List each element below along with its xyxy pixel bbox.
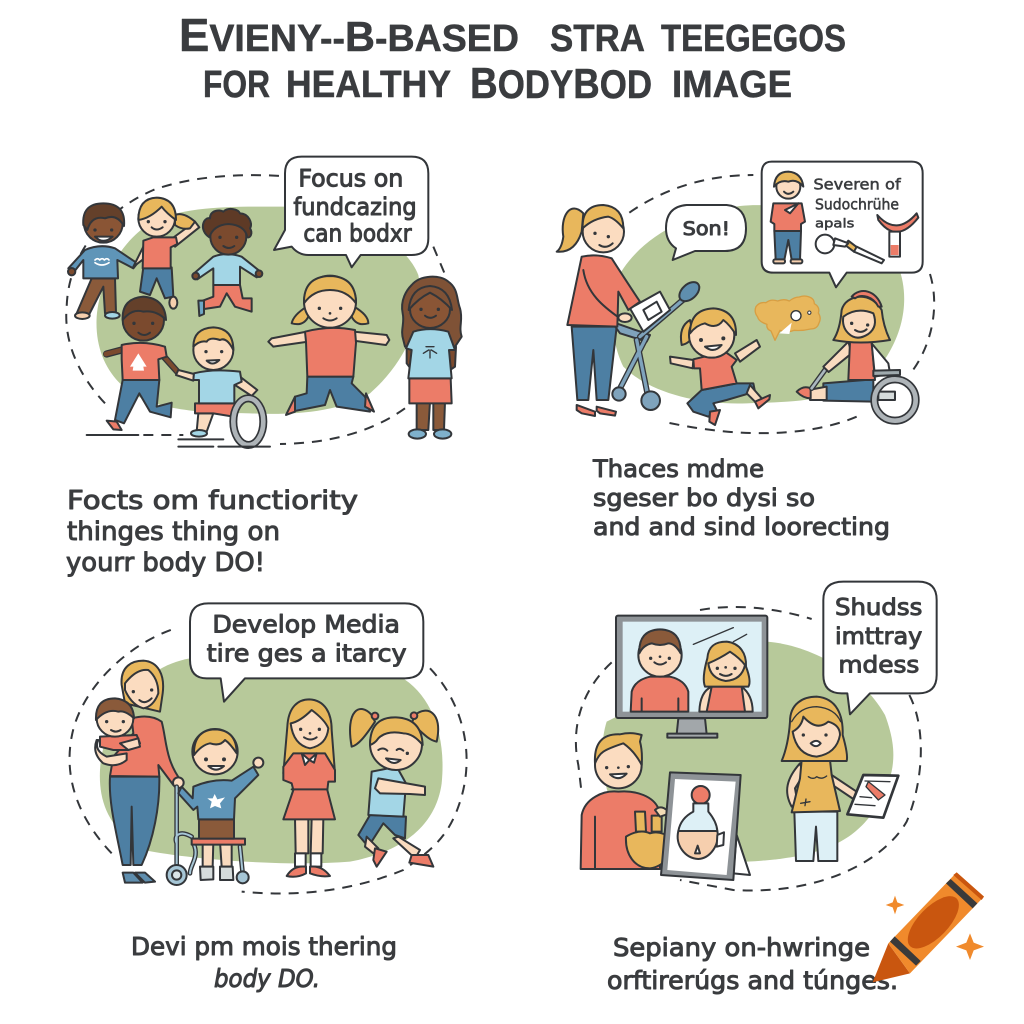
speech bubble: shudss: mdess (838, 652, 919, 678)
title: BODYBOD (470, 59, 652, 108)
caption: focus on functionality (66, 486, 358, 578)
icon: orange splat with thought (755, 296, 820, 340)
caption: develop media literacy (131, 932, 397, 993)
figure: smiling man with basket (581, 733, 672, 869)
title: HEALTHY (286, 64, 451, 106)
figure: girl with long dark hair (402, 277, 462, 439)
speech bubble: develop media (190, 603, 423, 702)
figure: curly-haired boy jumping (192, 209, 262, 316)
speech bubble: shudss: Shudss (835, 595, 922, 621)
figure: boy in salmon t-shirt running (106, 297, 177, 430)
speech bubble: seven goals: Severen of (813, 175, 901, 193)
speech bubble: son (666, 205, 746, 260)
speech bubble: focus on: can bodxr (303, 220, 412, 248)
icon: computer monitor with two people (616, 616, 767, 738)
speech bubble: focus on: fundcazing (293, 193, 417, 221)
figure: girl with pigtails skipping (350, 709, 438, 867)
speech bubble: son: Son! (683, 218, 730, 240)
icon: orange crayon with sparkles (873, 872, 984, 982)
panel: limit appearance talk (576, 582, 937, 890)
figure: laughing child sitting (670, 308, 770, 425)
speech bubble: focus on: Focus on (298, 165, 403, 193)
figure: blonde girl waving (133, 198, 199, 309)
speech bubble: develop media: Develop Media (212, 609, 400, 638)
caption: develop media literacy: body DO. (214, 964, 320, 993)
panel: develop media literacy (70, 603, 467, 893)
figure: girl in salmon dress (283, 699, 335, 877)
speech bubble: focus on (274, 157, 428, 267)
figure: girl in wheelchair (797, 291, 916, 421)
figure: mother holding baby (95, 661, 184, 883)
caption: develop media literacy: Devi pm mois thering (131, 932, 397, 961)
panel: focus on functionality (66, 157, 462, 447)
icon: little boy (771, 172, 805, 263)
icon: tools (816, 213, 918, 263)
figure: blonde boy with wheel (176, 327, 270, 447)
speech bubble: develop media: tire ges a itarcy (207, 639, 407, 668)
panel: family and body talk (557, 162, 934, 433)
figure: woman on screen (699, 642, 753, 712)
title (179, 9, 846, 108)
speech bubble: seven goals: Sudochrühe (815, 195, 899, 213)
caption: focus on functionality: yourr body DO! (66, 548, 265, 578)
figure: girl with clipboard (782, 697, 898, 861)
title: EVIENY--B-BASED (179, 9, 519, 61)
figure: girl with arms outstretched (268, 276, 389, 415)
speech bubble: seven goals: apals (815, 215, 854, 230)
speech bubble: seven goals (762, 162, 923, 287)
title: STRA (550, 18, 645, 60)
figure: man on screen (631, 629, 688, 712)
title: FOR (203, 64, 270, 106)
caption: focus on functionality: thinges thing on (67, 517, 280, 547)
speech bubble: shudss (823, 582, 937, 714)
figure: boy with walker waving (167, 729, 263, 885)
caption: self-compassion (592, 455, 890, 541)
figure: boy in blue sweater (68, 203, 137, 319)
title: IMAGE (672, 64, 792, 106)
caption: focus on functionality: Focts om functiority (67, 486, 358, 516)
speech bubble: shudss: imttray (835, 624, 922, 650)
caption: limit appearance talk (607, 933, 898, 995)
caption: self-compassion: and and sind loorecting (593, 513, 890, 541)
caption: self-compassion: sgeser bo dysi so (593, 484, 815, 512)
title: TEEGEGOS (661, 18, 846, 60)
icon: framed mirror with bottle (661, 772, 750, 880)
caption: limit appearance talk: orftirerúgs and túnges. (607, 966, 898, 995)
caption: self-compassion: Thaces mdme (592, 455, 764, 483)
figure: woman pushing walker (557, 205, 703, 416)
caption: limit appearance talk: Sepiany on-hwringe (613, 933, 870, 962)
